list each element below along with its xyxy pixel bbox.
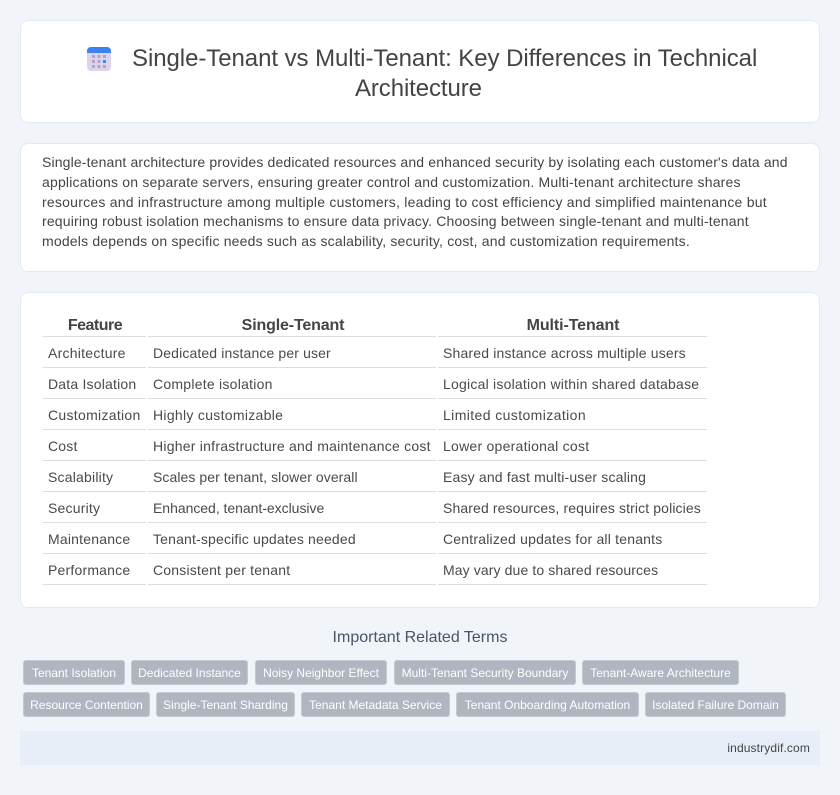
- table rows: Maintenance: [48, 531, 130, 547]
- panel: title header: [20, 20, 820, 123]
- table rows: Easy and fast multi-user scaling: [443, 469, 646, 485]
- text block: description paragraph: models depends on specific needs such as scalability, security, cost, and customization requirements.: [42, 233, 690, 249]
- icon: calendar grid: [87, 47, 111, 71]
- table rows: Scalability: [48, 469, 113, 485]
- table rows: Tenant-specific updates needed: [153, 531, 356, 547]
- table rows: Centralized updates for all tenants: [443, 531, 662, 547]
- table rows: May vary due to shared resources: [443, 562, 658, 578]
- table rows: Performance: [48, 562, 130, 578]
- heading: related terms: Important Related Terms: [333, 629, 507, 646]
- text block: description paragraph: Single-tenant architecture provides dedicated resources and enhanced security by isolating each customer's data and: [42, 154, 788, 170]
- title: Single-Tenant vs Multi-Tenant: Key Differences in Technical: [132, 45, 757, 72]
- footer source label: industrydif.com: [727, 741, 810, 755]
- table rows: Complete isolation: [153, 376, 273, 392]
- table rows: Cost: [48, 438, 78, 454]
- table rows: Data Isolation: [48, 376, 136, 392]
- table rows: Security: [48, 500, 100, 516]
- table rows: Highly customizable: [153, 407, 283, 423]
- related term tags: Tenant-Aware Architecture: [590, 666, 731, 680]
- related term tags: Tenant Isolation: [32, 666, 116, 680]
- table rows: Logical isolation within shared database: [443, 376, 699, 392]
- related term tags: [23, 660, 786, 717]
- table rows: Shared resources, requires strict policies: [443, 500, 701, 516]
- related term tags: Single-Tenant Sharding: [163, 698, 288, 712]
- related term tags: Isolated Failure Domain: [652, 698, 779, 712]
- panel: description: [20, 143, 820, 272]
- related term tags: Tenant Onboarding Automation: [465, 698, 630, 712]
- related term tags: Resource Contention: [30, 698, 143, 712]
- table rows: [43, 345, 707, 585]
- table header row: Multi-Tenant: [527, 317, 619, 334]
- table rows: Architecture: [48, 345, 126, 361]
- title: Architecture: [355, 74, 482, 102]
- panel: comparison table: [20, 292, 820, 608]
- title: [132, 45, 757, 102]
- related term tags: Noisy Neighbor Effect: [263, 666, 379, 680]
- table rows: Lower operational cost: [443, 438, 589, 454]
- related term tags: Multi-Tenant Security Boundary: [402, 666, 568, 680]
- table rows: Consistent per tenant: [153, 562, 290, 578]
- table rows: Scales per tenant, slower overall: [153, 469, 358, 485]
- table rows: Higher infrastructure and maintenance cost: [153, 438, 431, 454]
- text block: description paragraph: requiring robust isolation mechanisms to ensure data privacy. Choosing between single-tenant and multi-tenant: [42, 213, 749, 229]
- table rows: Shared instance across multiple users: [443, 345, 686, 361]
- table header row: Single-Tenant: [242, 317, 344, 334]
- related term tags: Tenant Metadata Service: [309, 698, 442, 712]
- table rows: Enhanced, tenant-exclusive: [153, 500, 324, 516]
- table rows: Dedicated instance per user: [153, 345, 331, 361]
- text block: description paragraph: applications on separate servers, ensuring greater control and customization. Multi-tenant architecture shares: [42, 174, 741, 190]
- table rows: Limited customization: [443, 407, 586, 423]
- table header row: Feature: [68, 317, 122, 334]
- text block: description paragraph: resources and infrastructure among multiple customers, leading to cost efficiency and simplified maintenance but: [42, 194, 767, 210]
- related term tags: Dedicated Instance: [138, 666, 241, 680]
- text block: description paragraph: [42, 154, 788, 249]
- table rows: Customization: [48, 407, 141, 423]
- footer bar: [20, 731, 820, 765]
- table header row: [43, 317, 707, 337]
